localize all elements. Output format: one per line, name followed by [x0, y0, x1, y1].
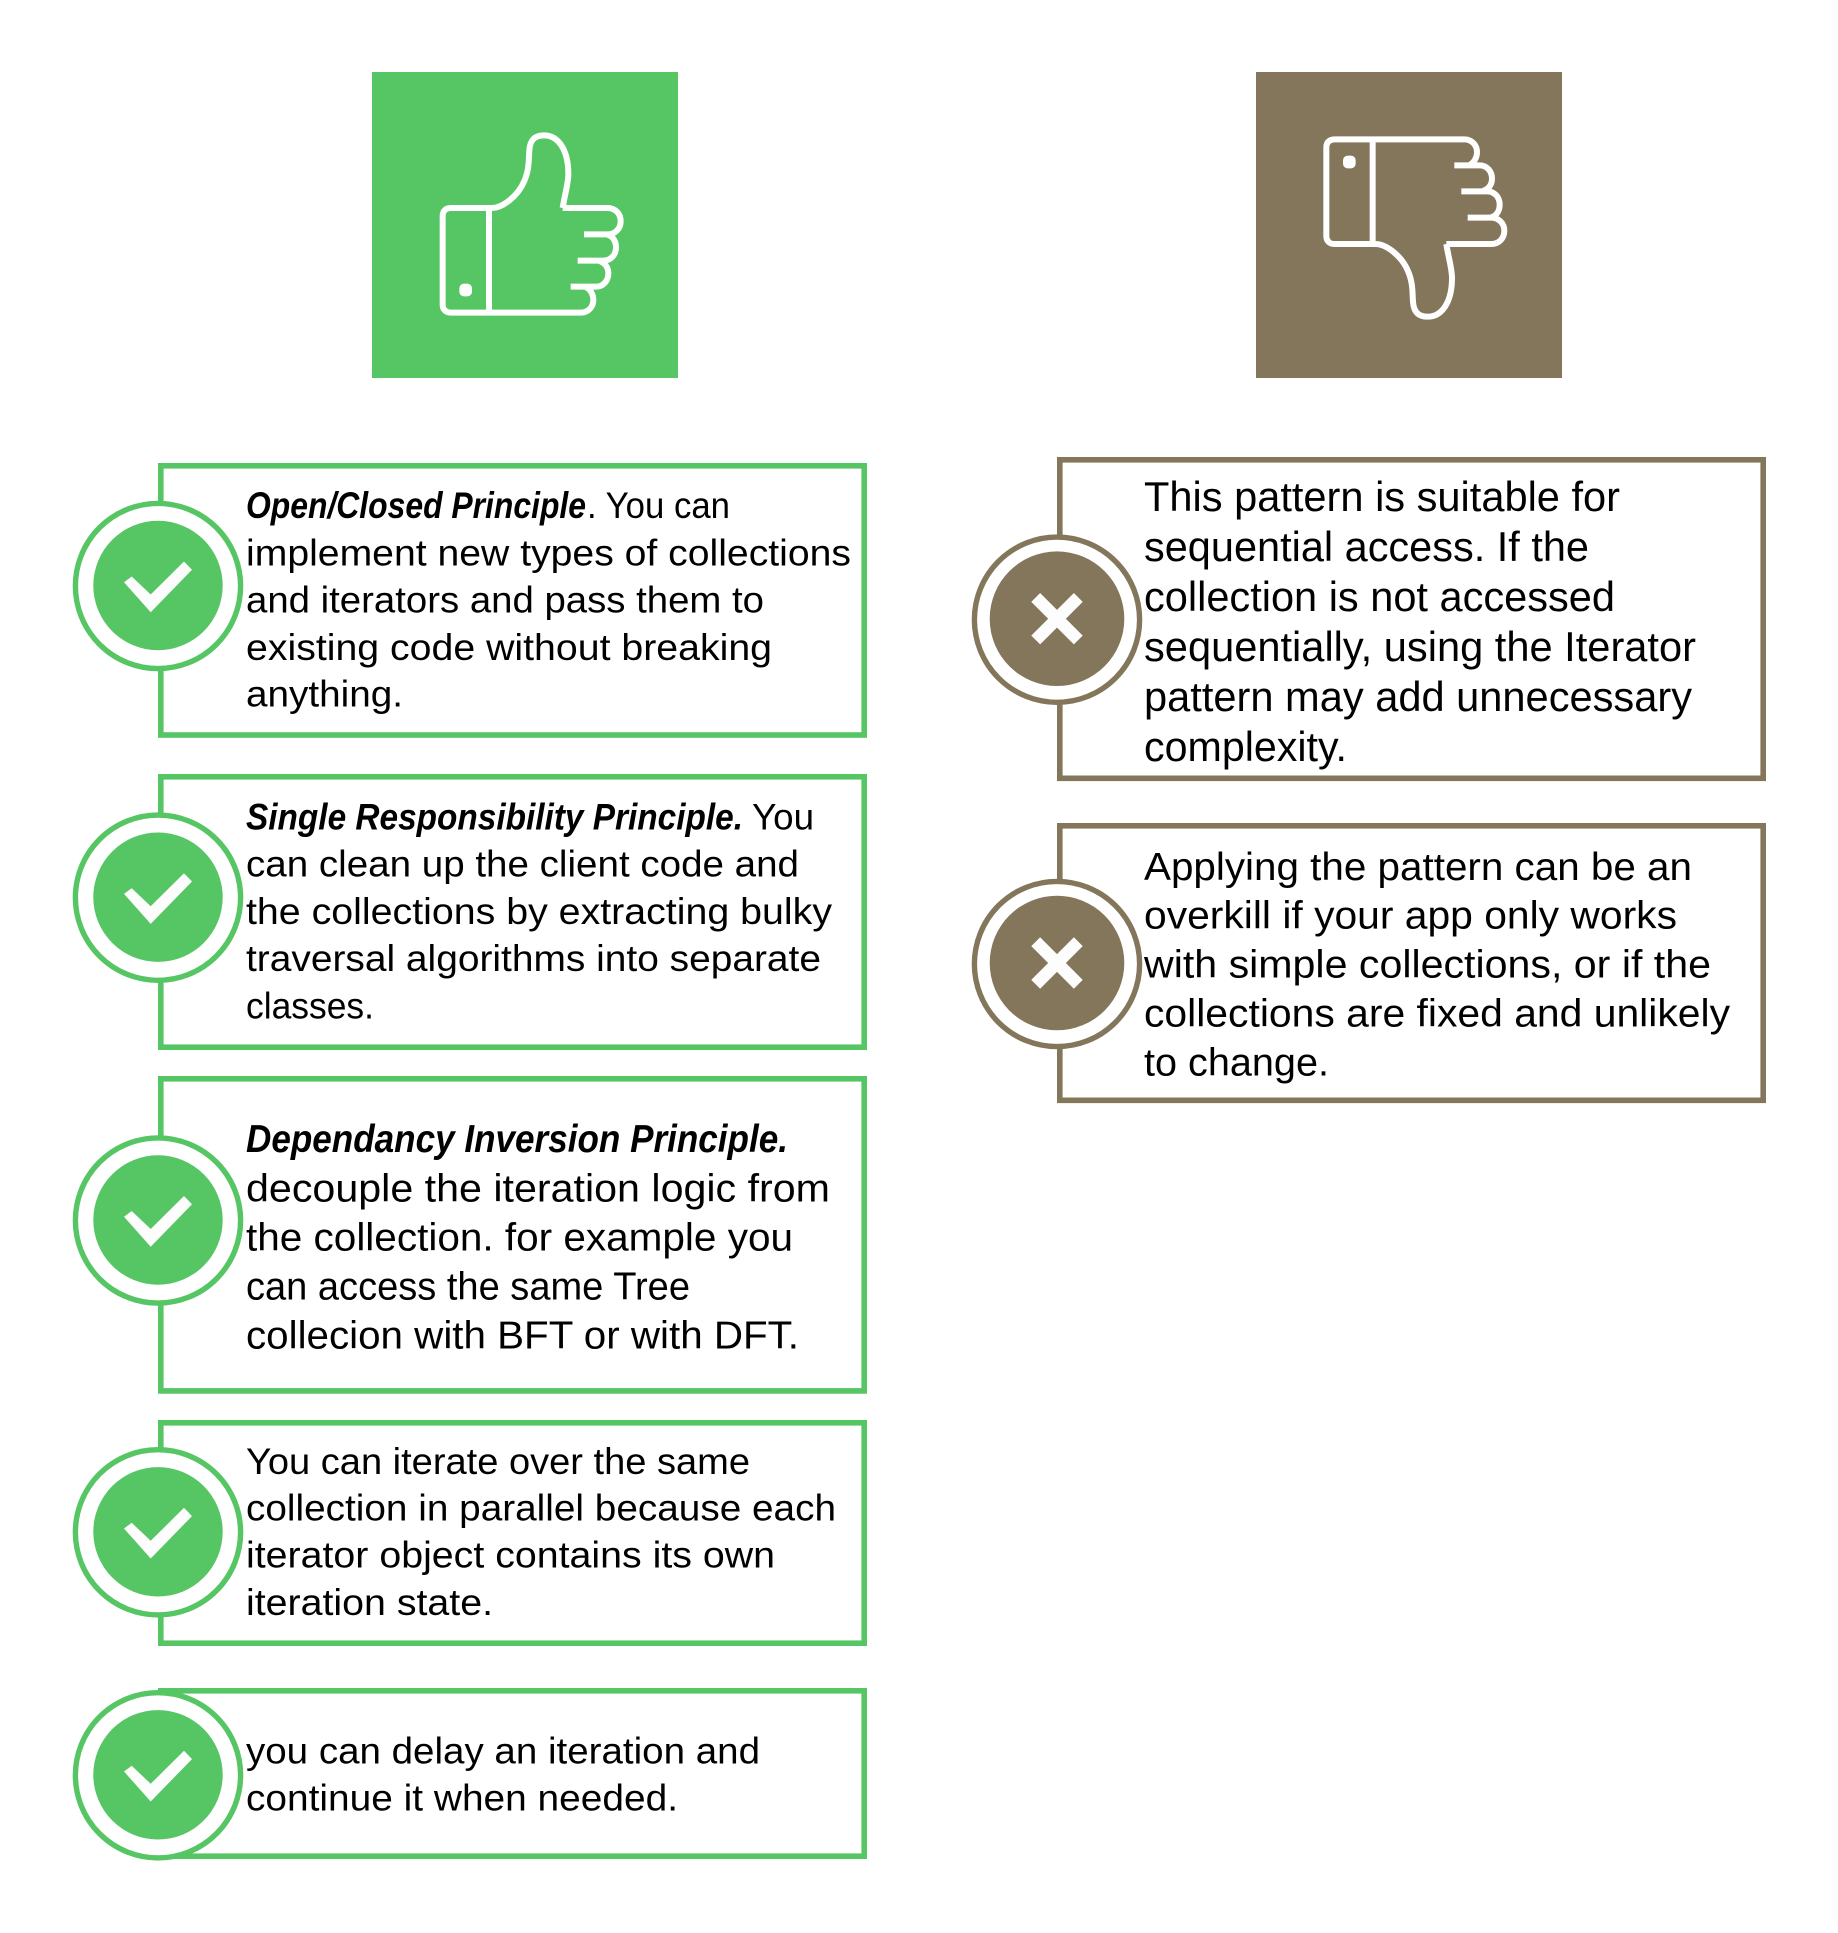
text: delayed iteration: continue it when needed. — [246, 1778, 678, 1819]
text: Open/Closed Principle: existing code without breaking — [246, 627, 772, 668]
text: Open/Closed Principle: implement new types of collections — [246, 532, 851, 573]
panel: pro 1, Open/Closed Principle — [75, 466, 864, 735]
text: sequential access: sequentially, using the Iterator — [1144, 623, 1696, 670]
panel: con 1, sequential access — [974, 460, 1763, 778]
text: Dependancy Inversion Principle — [246, 1118, 830, 1358]
icon: cross badge 2 — [974, 881, 1140, 1047]
icon: check badge 1 — [75, 503, 241, 669]
icon: check badge 4 — [75, 1450, 241, 1615]
text: Single Responsibility Principle — [246, 796, 833, 1026]
icon: check badge 3 — [75, 1138, 241, 1303]
text: Open/Closed Principle: anything. — [246, 674, 403, 715]
text: parallel iteration: You can iterate over the same — [246, 1441, 750, 1482]
text: Open/Closed Principle — [246, 485, 851, 715]
text: Open/Closed Principle: . You can — [587, 485, 730, 526]
text: sequential access — [1144, 473, 1696, 770]
text: Single Responsibility Principle: Single Responsibility Principle. — [246, 796, 743, 837]
text: delayed iteration — [246, 1730, 760, 1819]
text: sequential access: complexity. — [1144, 723, 1347, 770]
panel: con 2, overkill for simple collections — [974, 826, 1763, 1100]
text: sequential access: sequential access. If the — [1144, 523, 1589, 570]
text: Open/Closed Principle: Open/Closed Principle — [246, 485, 586, 526]
text: Single Responsibility Principle: the collections by extracting bulky — [246, 891, 833, 932]
text: Single Responsibility Principle: classes. — [246, 985, 374, 1026]
text: delayed iteration: you can delay an iteration and — [246, 1730, 760, 1771]
text: Dependancy Inversion Principle: collecion with BFT or with DFT. — [246, 1314, 799, 1358]
panel: pro 4, parallel iteration — [75, 1423, 864, 1643]
text: Single Responsibility Principle: can clean up the client code and — [246, 844, 799, 885]
icon: cross badge 1 — [974, 537, 1140, 702]
icon: check badge 2 — [75, 815, 241, 980]
text: Dependancy Inversion Principle: Dependancy Inversion Principle. — [246, 1118, 788, 1161]
text: Dependancy Inversion Principle: can access the same Tree — [246, 1266, 690, 1308]
panel: pro 2, Single Responsibility Principle — [75, 777, 864, 1047]
text: sequential access: collection is not accessed — [1144, 573, 1615, 620]
text: sequential access: This pattern is suitable for — [1144, 473, 1620, 520]
text: overkill for simple collections: collections are fixed and unlikely — [1144, 993, 1731, 1036]
panel: cons icon, brown thumbs down — [1256, 72, 1562, 378]
panel: pros icon, green thumbs up — [372, 72, 678, 378]
text: Dependancy Inversion Principle: the collection. for example you — [246, 1216, 793, 1260]
panel: pro 3, Dependancy Inversion Principle — [75, 1079, 864, 1391]
text: Single Responsibility Principle: traversal algorithms into separate — [246, 938, 821, 979]
text: parallel iteration: collection in parallel because each — [246, 1488, 836, 1529]
text: parallel iteration — [246, 1441, 836, 1623]
text: sequential access: pattern may add unnecessary — [1144, 673, 1692, 720]
text: overkill for simple collections: Applying the pattern can be an — [1144, 846, 1692, 889]
icon: check badge 5 — [75, 1693, 241, 1858]
text: overkill for simple collections: overkill if your app only works — [1144, 894, 1677, 938]
text: overkill for simple collections — [1143, 846, 1731, 1084]
text: Dependancy Inversion Principle: decouple the iteration logic from — [246, 1168, 830, 1211]
text: Single Responsibility Principle: You — [752, 796, 814, 837]
text: parallel iteration: iterator object contains its own — [246, 1535, 775, 1576]
text: Open/Closed Principle: and iterators and pass them to — [246, 580, 764, 621]
text: parallel iteration: iteration state. — [246, 1582, 493, 1623]
text: overkill for simple collections: with simple collections, or if the — [1143, 944, 1711, 986]
panel: pro 5, delayed iteration — [75, 1691, 864, 1858]
text: overkill for simple collections: to change. — [1144, 1042, 1329, 1084]
